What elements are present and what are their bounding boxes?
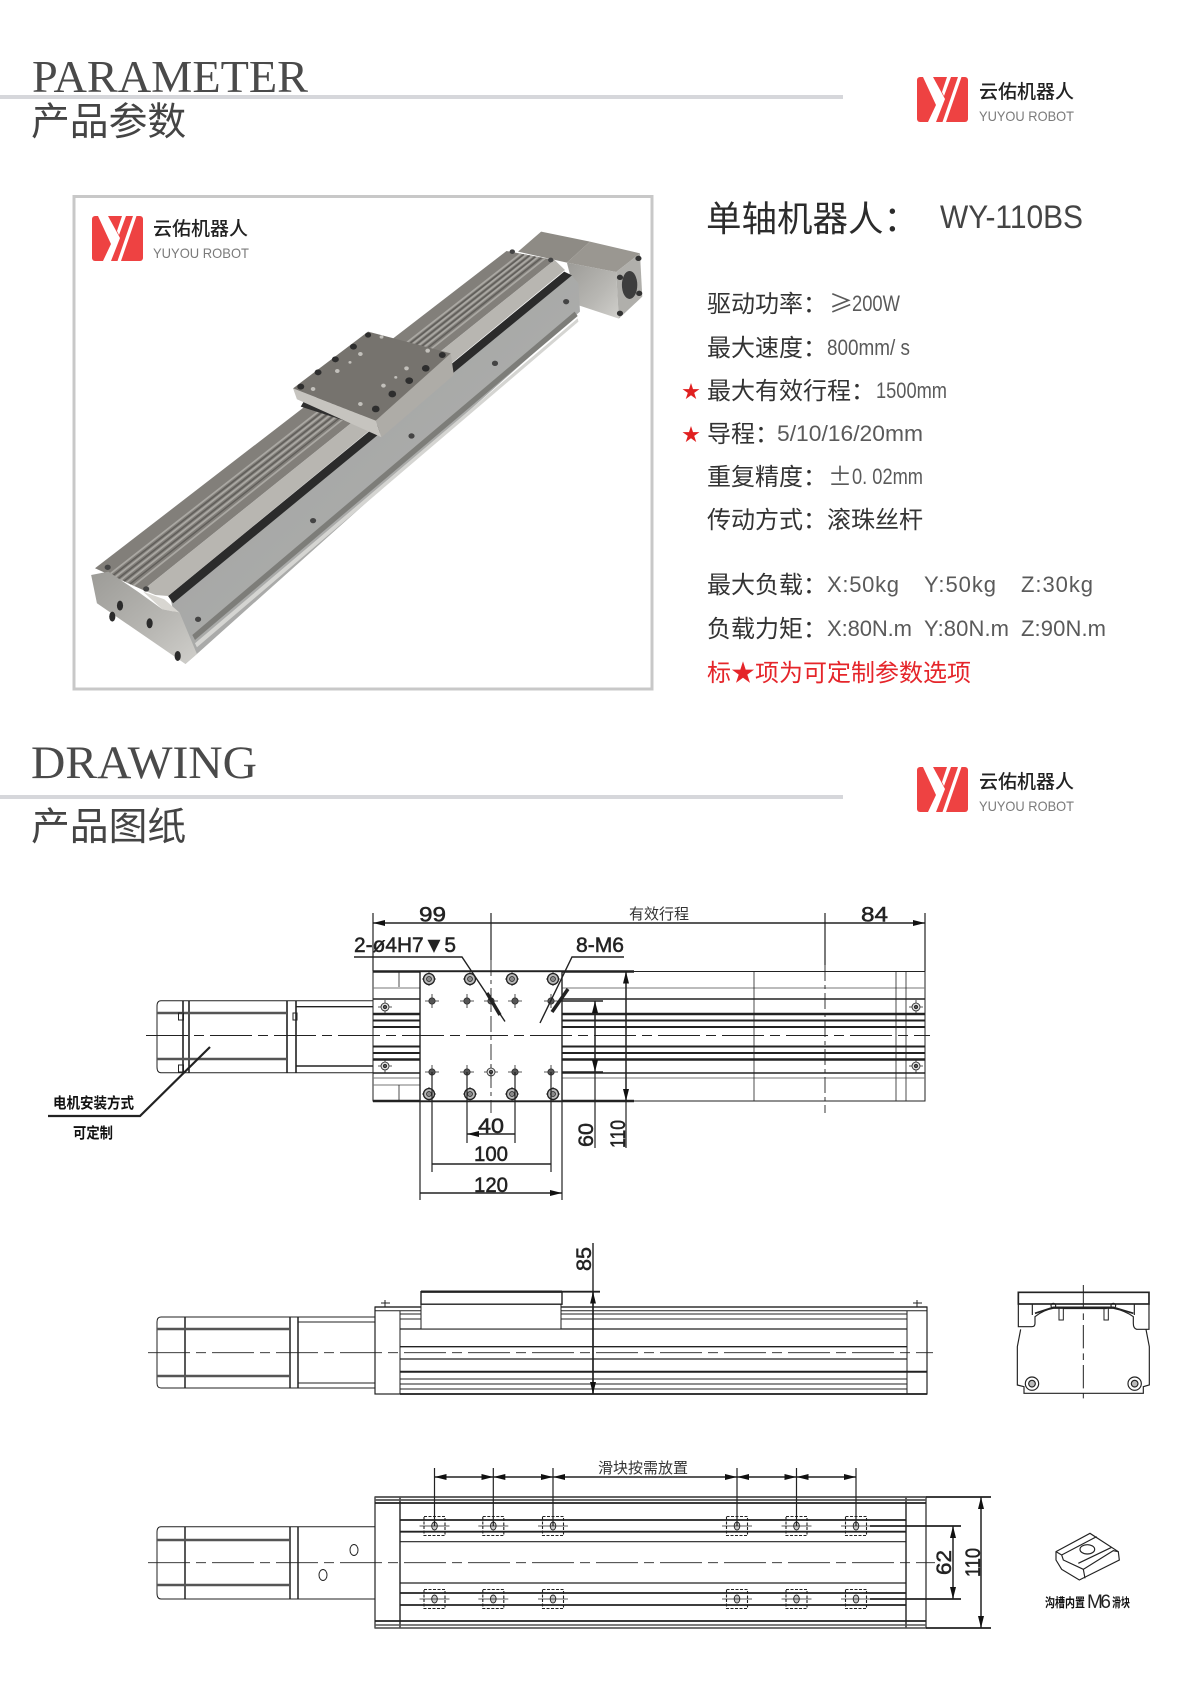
dimension: slider spacing	[434, 1457, 856, 1526]
spec: max load: Z:30kg	[1021, 572, 1093, 597]
slider: side view	[421, 1292, 562, 1329]
motor: side view	[157, 1317, 375, 1388]
spec: load moment: 负载力矩：	[707, 609, 827, 644]
section heading: drawing: 产品图纸	[31, 796, 186, 852]
spec: repeat accuracy	[707, 457, 923, 492]
logo: drawing section: 云佑机器人	[979, 767, 1074, 794]
spec: drive power	[707, 284, 900, 319]
spec: max load: Y:50kg	[924, 572, 996, 597]
callout: 8-M6: 8-M6	[576, 934, 624, 957]
spec: max stroke: 最大有效行程：	[707, 371, 875, 406]
label: T-nut slider: 滑块	[1112, 1592, 1130, 1611]
product title: WY-110BS	[940, 199, 1083, 235]
dimensions: top: 99	[419, 904, 446, 926]
spec: lead: 5/10/16/20mm	[777, 421, 923, 446]
section heading: drawing	[0, 737, 843, 852]
spec: max stroke	[682, 371, 947, 406]
linear body: top view	[373, 972, 925, 1101]
dimensions: top	[373, 903, 925, 971]
spec: max speed: 800mm/ s	[827, 335, 910, 360]
motor: top view	[157, 1001, 373, 1073]
logo: top right	[917, 77, 1074, 124]
product render: linear module	[91, 232, 642, 664]
spec list	[682, 284, 1106, 688]
dimensions: vertical 60 and 110	[562, 972, 630, 1148]
linear body: side view	[375, 1300, 927, 1394]
dimensions: 62 and 110: 110	[962, 1548, 985, 1577]
section heading: parameter: PARAMETER	[32, 52, 308, 102]
logo: top right: 云佑机器人	[979, 77, 1074, 104]
dimensions: 62 and 110: 62	[933, 1550, 956, 1575]
callout: motor mounting: 电机安装方式	[53, 1092, 134, 1113]
panel: product photo	[74, 196, 652, 689]
icon: T-nut slider	[1056, 1533, 1119, 1580]
slider slots: bottom view	[420, 1516, 871, 1608]
dimensions: vertical 60 and 110: 60	[575, 1123, 598, 1147]
drawing: side view	[148, 1243, 933, 1394]
dimensions: 62 and 110	[870, 1497, 991, 1628]
logo: in photo panel	[92, 214, 249, 261]
spec: load moment	[707, 609, 1106, 644]
spec: max load	[707, 565, 1093, 600]
spec: lead: ★	[682, 421, 700, 447]
spec: max speed: 最大速度：	[707, 328, 827, 363]
callout: motor mounting	[48, 1047, 210, 1143]
spec: repeat accuracy: ±	[828, 457, 852, 492]
dimensions: vertical 60 and 110: 110	[607, 1120, 630, 1148]
callout: 2-Ø4H7	[354, 934, 505, 1022]
motor: bottom view	[157, 1527, 375, 1599]
logo: drawing section: YUYOU ROBOT	[979, 798, 1074, 814]
label: T-nut slider	[1045, 1592, 1130, 1613]
spec: max load: X:50kg	[827, 572, 899, 597]
spec: max stroke: ★	[682, 378, 700, 404]
dimensions: plate: 40	[478, 1115, 504, 1138]
label: T-nut slider: 沟槽内置	[1045, 1592, 1085, 1611]
logo: in photo panel: 云佑机器人	[153, 214, 248, 241]
product title: 单轴机器人：	[706, 191, 919, 242]
spec: load moment: Z:90N.m	[1021, 616, 1106, 641]
linear body: bottom view	[375, 1497, 926, 1628]
callout: 2-Ø4H7: 2-ø4H7▼5	[354, 934, 456, 957]
dimension: 85: 85	[573, 1247, 596, 1271]
spec: drive power: 200W	[852, 291, 900, 316]
dimension: slider spacing: 滑块按需放置	[598, 1457, 688, 1478]
drawing: bottom view	[148, 1457, 991, 1628]
logo: top right: YUYOU ROBOT	[979, 108, 1074, 124]
dimensions: plate	[420, 1072, 562, 1200]
callout: motor mounting: 可定制	[73, 1122, 113, 1143]
spec: max stroke: 1500mm	[876, 378, 947, 403]
spec: transmission: 传动方式：滚珠丝杆	[707, 500, 923, 535]
logo: in photo panel: YUYOU ROBOT	[153, 245, 249, 261]
spec: lead: 导程：	[707, 414, 779, 449]
drawing: end view	[1017, 1285, 1149, 1398]
product title	[706, 191, 1083, 242]
spec: max load: 最大负载：	[707, 565, 827, 600]
spec: repeat accuracy: 重复精度：	[707, 457, 827, 492]
spec: max speed	[707, 328, 910, 363]
section heading: parameter	[0, 52, 843, 147]
section heading: drawing: DRAWING	[31, 737, 257, 789]
spec: drive power: 驱动功率：	[707, 284, 827, 319]
drawing: top view	[48, 903, 930, 1200]
dimensions: top: 84	[861, 904, 888, 926]
dimensions: plate: 120	[474, 1174, 508, 1197]
slider plate	[420, 972, 562, 1101]
spec: load moment: X:80N.m	[827, 616, 912, 641]
dimensions: top: 有效行程	[629, 903, 689, 924]
spec: drive power: ≥	[829, 284, 853, 319]
spec: load moment: Y:80N.m	[924, 616, 1009, 641]
label: T-nut slider: M6	[1087, 1592, 1111, 1613]
spec: lead	[682, 414, 923, 449]
spec: repeat accuracy: 0. 02mm	[852, 464, 923, 489]
dimensions: plate: 100	[474, 1143, 508, 1166]
logo: drawing section	[917, 767, 1074, 814]
section heading: parameter: 产品参数	[31, 91, 186, 147]
callout: 8-M6	[540, 934, 624, 1023]
note: customizable: 标★项为可定制参数选项	[707, 653, 971, 688]
